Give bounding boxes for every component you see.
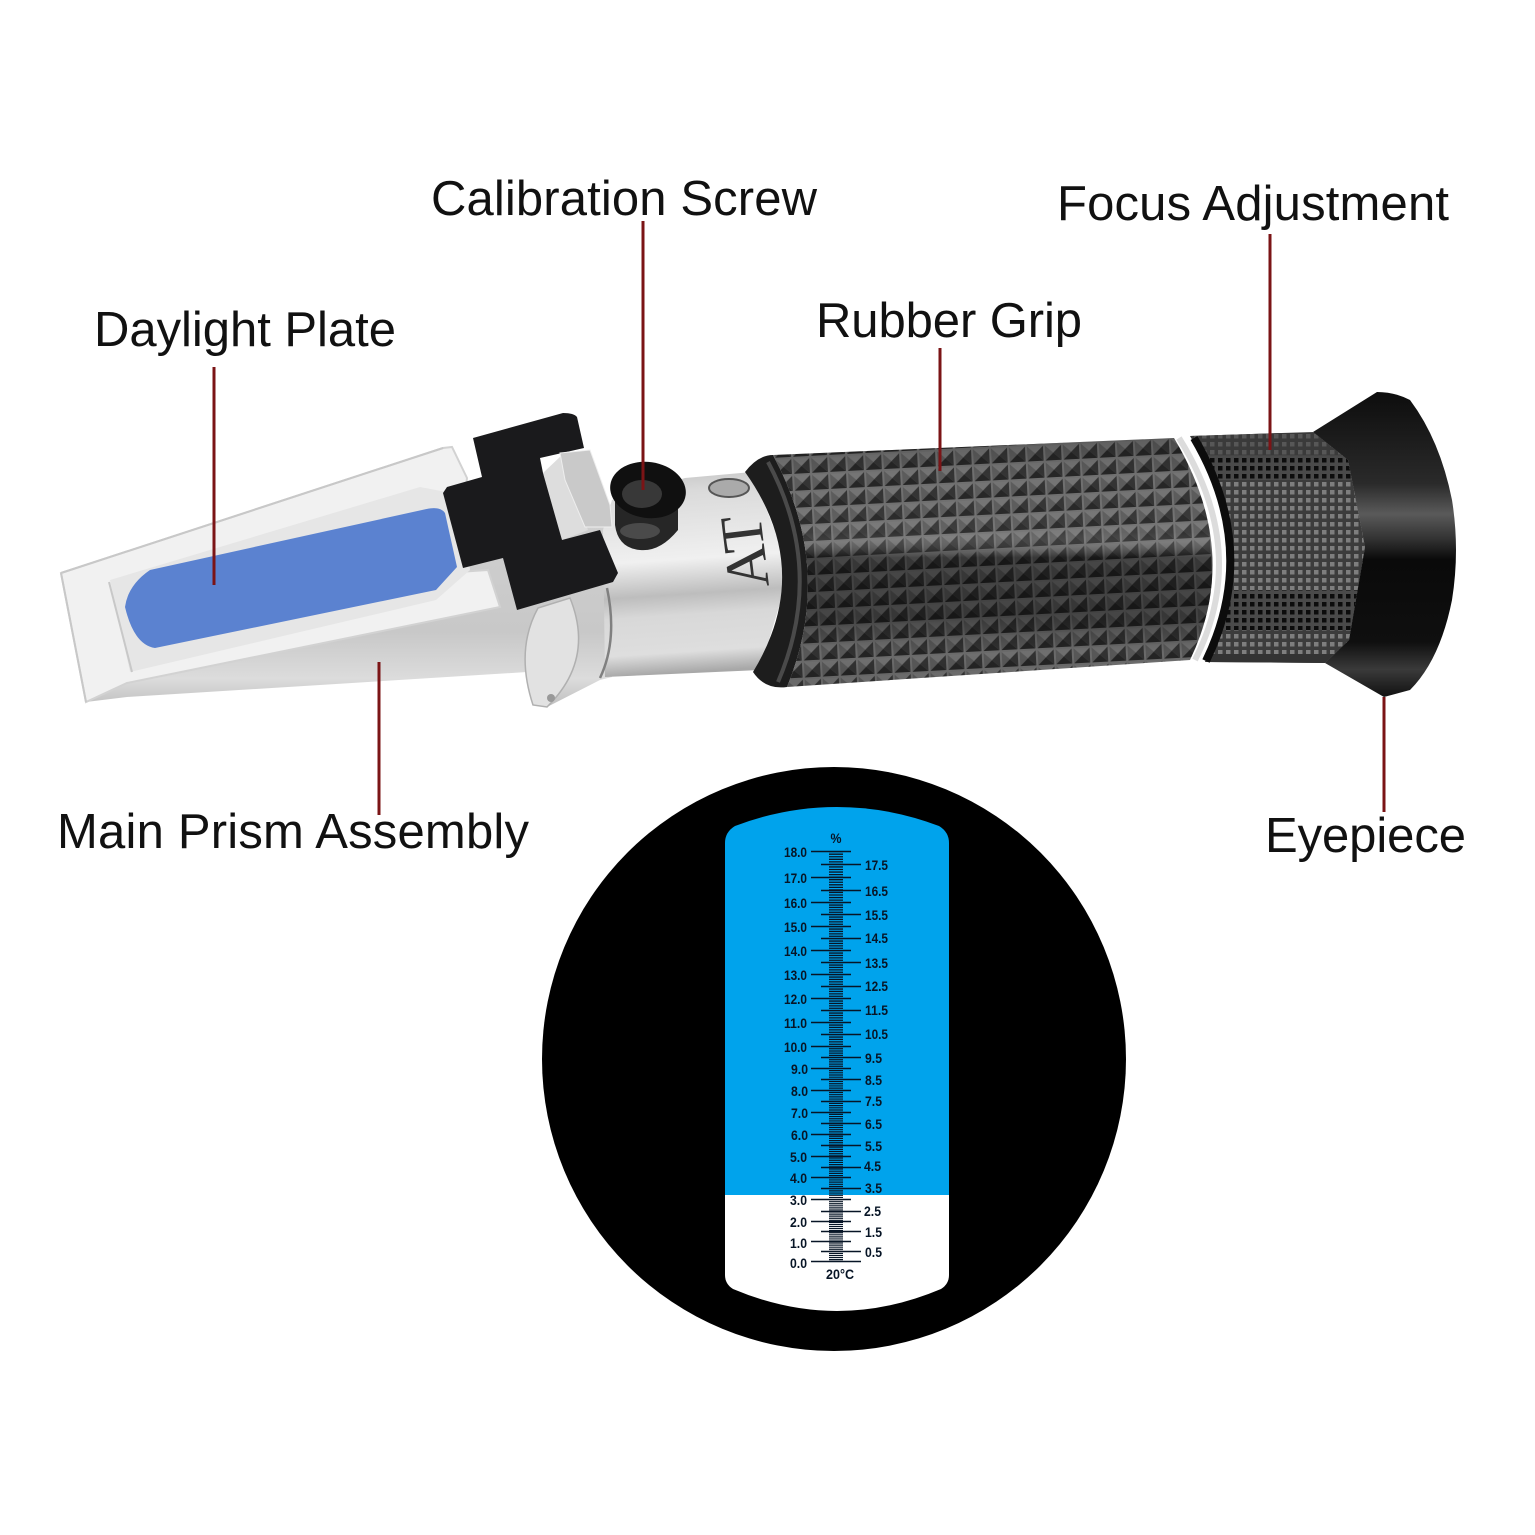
left major ticks <box>811 852 861 1262</box>
label: rubber grip: Rubber Grip <box>816 294 1082 348</box>
left scale numbers: 11.0 <box>784 1015 807 1031</box>
right scale numbers: 0.5 <box>865 1244 882 1260</box>
leader: main prism assembly <box>378 662 380 815</box>
left scale numbers: 2.0 <box>790 1214 807 1230</box>
right half ticks <box>821 864 861 1252</box>
left scale numbers: 8.0 <box>791 1083 808 1099</box>
flange ring <box>525 588 611 707</box>
transparent cover <box>61 447 500 702</box>
label: calibration screw: Calibration Screw <box>431 172 818 226</box>
ATC engraved text: AT <box>707 512 782 592</box>
leader: calibration screw <box>642 221 644 490</box>
left scale numbers: 12.0 <box>784 991 807 1007</box>
reading panel <box>725 800 949 1315</box>
percent sign: % <box>830 830 842 846</box>
focus adjustment ring <box>1190 432 1365 663</box>
left scale numbers: 1.0 <box>790 1235 807 1251</box>
left scale numbers: 10.0 <box>784 1039 807 1055</box>
left scale numbers: 7.0 <box>791 1105 808 1121</box>
leader: daylight plate <box>212 367 216 585</box>
left scale numbers <box>784 844 808 1271</box>
right scale numbers: 11.5 <box>865 1002 888 1018</box>
fine graduation ticks <box>829 851 843 1261</box>
left scale numbers: 9.0 <box>791 1061 808 1077</box>
right scale numbers: 8.5 <box>865 1072 882 1088</box>
temperature note: 20°C <box>826 1266 854 1282</box>
leader: focus adjustment <box>1268 234 1272 450</box>
right scale numbers: 17.5 <box>865 857 888 873</box>
right scale numbers: 7.5 <box>865 1093 882 1109</box>
right scale numbers: 10.5 <box>865 1026 888 1042</box>
left scale numbers: 4.0 <box>790 1170 807 1186</box>
label: focus adjustment: Focus Adjustment <box>1057 177 1449 231</box>
eyepiece cup <box>1313 392 1456 697</box>
leader: eyepiece <box>1382 697 1386 812</box>
silver latch <box>560 450 612 527</box>
right scale numbers: 3.5 <box>865 1180 882 1196</box>
right scale numbers: 15.5 <box>865 907 888 923</box>
left scale numbers: 17.0 <box>784 870 807 886</box>
glass behind latch <box>543 455 588 540</box>
scale view through eyepiece <box>542 767 1126 1351</box>
left scale numbers: 14.0 <box>784 943 807 959</box>
right scale numbers: 16.5 <box>865 883 888 899</box>
front grip ring <box>745 455 808 687</box>
daylight plate <box>125 508 457 648</box>
label: eyepiece: Eyepiece <box>1265 809 1466 863</box>
calibration screw knob <box>606 457 690 550</box>
right scale numbers: 9.5 <box>865 1050 882 1066</box>
left scale numbers: 6.0 <box>791 1127 808 1143</box>
left scale numbers: 15.0 <box>784 919 807 935</box>
right scale numbers: 1.5 <box>865 1224 882 1240</box>
label: daylight plate: Daylight Plate <box>94 303 396 357</box>
leader: rubber grip <box>938 348 942 471</box>
left scale numbers: 3.0 <box>790 1192 807 1208</box>
right scale numbers: 4.5 <box>864 1158 881 1174</box>
right scale numbers: 14.5 <box>865 930 888 946</box>
right scale numbers: 13.5 <box>865 955 888 971</box>
left scale numbers: 13.0 <box>784 967 807 983</box>
black clip <box>443 413 618 610</box>
left scale numbers: 5.0 <box>790 1149 807 1165</box>
main prism cone <box>86 520 620 707</box>
label: main prism assembly: Main Prism Assembly <box>57 805 530 859</box>
left scale numbers: 0.0 <box>790 1255 807 1271</box>
right scale numbers: 12.5 <box>865 978 888 994</box>
left scale numbers: 18.0 <box>784 844 807 860</box>
right scale numbers: 5.5 <box>865 1138 882 1154</box>
right scale numbers: 2.5 <box>864 1203 881 1219</box>
black viewing circle <box>542 767 1126 1351</box>
white separator ring <box>1179 438 1219 660</box>
metal barrel <box>603 472 790 677</box>
right scale numbers: 6.5 <box>865 1116 882 1132</box>
left scale numbers: 16.0 <box>784 895 807 911</box>
dark separator band <box>1194 438 1230 661</box>
refractometer device <box>61 392 1456 707</box>
right scale numbers <box>864 857 888 1260</box>
rubber grip <box>773 438 1213 687</box>
